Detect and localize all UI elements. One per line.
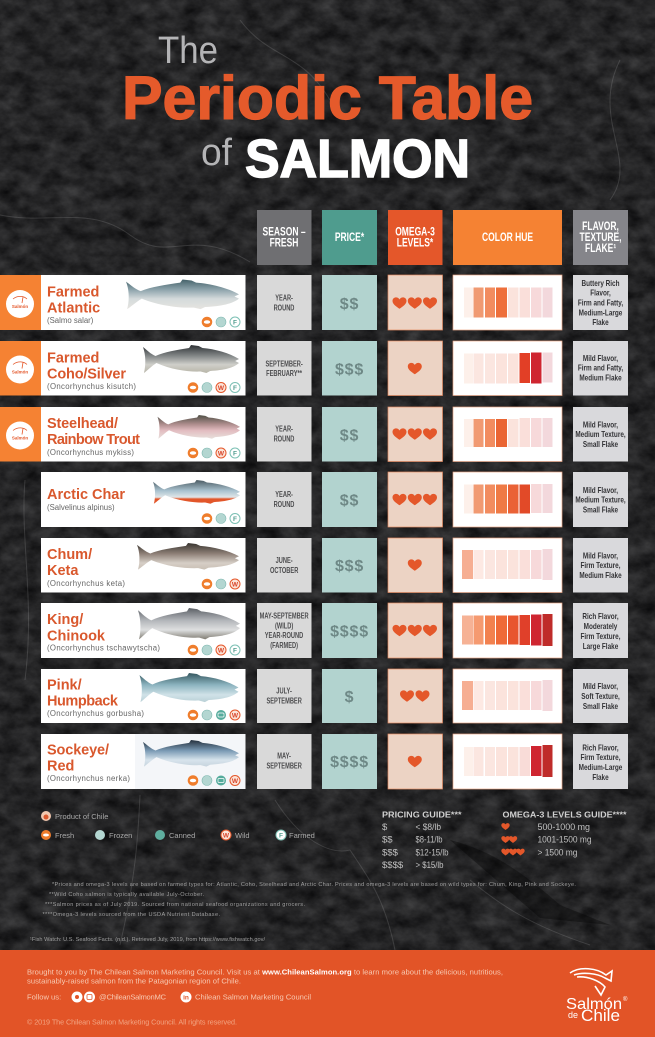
name card: Chum/ [47,547,92,563]
season [257,734,312,789]
name card: Farmed [47,284,99,300]
season: ROUND [274,433,294,444]
name card: W [232,778,239,785]
row: farmed coho/silver [0,341,628,396]
season [257,341,312,396]
product of chile tab: Salmón [12,370,28,374]
flavor: Rich Flavor, [582,743,619,753]
flavor: Mild Flavor, [583,353,618,363]
name card: Arctic Char [47,487,125,503]
name card: W [218,647,225,654]
name card: W [232,712,239,719]
name card: (Oncorhynchus tschawytscha) [47,644,160,652]
color hue swatches [453,341,562,396]
name card: F [233,385,237,392]
name card: (Oncorhynchus kisutch) [47,382,136,391]
price: $$$ [335,558,364,575]
pricing guide: $$ [382,834,393,846]
omega-3 levels guide [501,810,627,858]
flavor: Small Flake [583,505,618,515]
name card [41,734,246,789]
pricing guide: $8-11/lb [416,834,442,846]
name card: W [218,450,225,457]
social links: Chilean Salmon Marketing Council [195,992,311,1002]
flavor: Mild Flavor, [583,420,618,430]
copyright: © 2019 The Chilean Salmon Marketing Council. All rights reserved. [27,1018,237,1026]
omega-3 hearts [388,538,442,592]
flavor [573,275,628,330]
pricing guide: < $8/lb [416,822,441,833]
price: $$ [340,492,359,510]
column header: flavor: FLAKE¹ [585,243,617,255]
column header: flavor: TEXTURE, [579,232,622,244]
column header: color hue [453,210,562,265]
price [322,472,377,527]
season: FEBRUARY** [266,368,302,378]
name card: (Oncorhynchus nerka) [47,774,130,783]
name card: F [233,647,237,654]
product of chile tab: Salmón [12,304,28,309]
name card: Coho/Silver [47,366,126,382]
source citation: ¹Fish Watch: U.S. Seafood Facts. (n.d.). Retrieved July, 2019, from https://www.fishwatch.gov/ [30,937,265,943]
row: chum/keta [41,538,628,592]
flavor: Moderately [584,621,617,631]
row: sockeye/red [41,734,628,789]
footer band [0,950,655,1037]
name card [41,472,246,527]
pricing guide: $12-15/lb [416,848,448,858]
name card: W [232,581,239,588]
name card: F [233,516,237,523]
pricing guide: $ [382,822,388,833]
title [122,30,533,189]
flavor: Medium Flake [579,373,622,383]
price [322,407,377,462]
price: $$$$ [330,754,369,771]
omega-3 levels guide: 500-1000 mg [538,822,590,833]
color hue swatches [453,538,562,592]
season: (FARMED) [270,640,298,650]
row: steelhead/rainbow trout [0,407,628,462]
omega-3 levels guide: OMEGA-3 LEVELS GUIDE**** [502,810,627,820]
name card: F [233,450,237,457]
flavor: Firm Texture, [580,752,621,762]
column header: flavor [573,210,628,265]
flavor: Medium Texture, [575,429,626,439]
season: YEAR-ROUND [265,630,303,640]
season: YEAR- [275,489,293,499]
column header: color hue: COLOR HUE [482,232,533,244]
season: JULY- [276,685,292,696]
flavor: Mild Flavor, [583,485,618,495]
flavor [573,603,628,658]
flavor [573,669,628,723]
name card: Steelhead/ [47,416,118,432]
season: YEAR- [275,423,293,434]
color hue swatches [453,669,562,723]
season: SEPTEMBER [266,695,302,706]
flavor: Medium-Large [579,762,622,772]
season [257,669,312,723]
flavor: Buttery Rich [581,278,620,288]
flavor: Medium-Large [579,308,622,318]
name card: (Oncorhynchus keta) [47,579,125,588]
footnotes: ***Salmon prices as of July 2019. Sourced from national seafood organizations and grocers. [45,902,305,908]
title: SALMON [245,129,470,189]
price: $$ [340,428,359,444]
name card: Farmed [47,350,99,366]
omega-3 hearts [388,407,442,462]
flavor: Flake [592,772,609,782]
icon legend: Wild [235,831,250,840]
name card: Red [47,758,74,774]
social links [27,992,311,1002]
color hue swatches [453,407,562,462]
name card: Atlantic [47,300,100,316]
row: farmed atlantic [0,275,628,330]
name card: Sockeye/ [47,742,109,758]
column header: price: PRICE* [335,232,364,244]
price: $$$$ [330,624,369,640]
price: $ [345,689,354,706]
name card: (Oncorhynchus gorbusha) [47,709,144,718]
icon legend: Farmed [289,831,315,840]
name card [41,603,246,658]
flavor: Mild Flavor, [583,551,618,561]
price [322,538,377,592]
product of chile tab [0,275,41,330]
omega-3 levels guide: 1001-1500 mg [538,834,592,846]
footer message: sustainably-raised salmon from the Patagonian region of Chile. [27,976,241,986]
season: YEAR- [275,292,293,303]
pricing guide: $$$$ [382,860,404,871]
pricing guide: PRICING GUIDE*** [382,810,462,820]
name card [41,275,246,330]
flavor [573,472,628,527]
name card [41,669,246,723]
color hue swatches [453,734,562,789]
price [322,275,377,330]
flavor: Flake [592,317,609,327]
title: of [201,132,232,174]
logo: salmon de chile: Salmón [566,996,622,1013]
season [257,472,312,527]
logo: salmon de chile: Chile [581,1007,620,1025]
omega-3 hearts [388,734,442,789]
price: $$ [340,296,359,313]
footnotes: ****Omega-3 levels sourced from the USDA Nutrient Database. [42,912,220,918]
product of chile tab [0,407,41,462]
flavor [573,407,628,462]
omega-3 hearts [388,275,442,330]
name card: King/ [47,612,83,628]
season: MAY-SEPTEMBER [260,610,309,621]
omega-3 hearts [388,472,442,527]
omega-3 levels guide: > 1500 mg [538,848,578,858]
season: SEPTEMBER- [265,358,303,369]
flavor [573,538,628,592]
price [322,734,377,789]
omega-3 hearts [388,603,442,658]
flavor: Soft Texture, [581,691,620,701]
pricing guide [382,810,462,871]
flavor [573,734,628,789]
social links: @ChileanSalmonMC [99,992,167,1002]
name card [41,538,246,592]
season: ROUND [274,499,294,509]
flavor: Firm and Fatty, [578,363,623,373]
logo: salmon de chile: ® [623,996,628,1003]
icon legend: Product of Chile [55,812,108,821]
title: The [158,30,218,72]
flavor: Small Flake [583,439,618,449]
icon legend: W [223,832,230,839]
season [257,538,312,592]
column header: flavor: FLAVOR, [582,221,619,233]
flavor [573,341,628,396]
season: OCTOBER [270,565,299,575]
name card: Keta [47,563,79,579]
pricing guide: $$$ [382,848,399,858]
season [257,407,312,462]
season: ROUND [274,302,294,313]
flavor: Firm Texture, [580,560,621,570]
name card: (Salvelinus alpinus) [47,503,115,512]
omega-3 hearts [388,341,442,396]
flavor: Mild Flavor, [583,681,618,691]
column header: price [322,210,377,265]
name card: F [233,319,237,326]
product of chile tab [0,341,41,396]
icon legend: Frozen [109,831,132,840]
row: king/chinook [41,603,628,658]
price [322,603,377,658]
footnotes [42,882,576,918]
price: $$$ [335,362,364,378]
title: Periodic Table [122,64,533,132]
logo: salmon de chile: de [568,1010,578,1020]
name card: Humpback [47,694,119,710]
flavor: Large Flake [583,641,618,651]
flavor: Rich Flavor, [582,611,619,621]
season: (WILD) [275,620,294,631]
footnotes: *Prices and omega-3 levels are based on farmed types for: Atlantic, Coho, Steelhead and Arctic Char. Prices and omega-3 levels are based on wild types for: Chum, King, Pink and Sockeye. [52,882,576,888]
price [322,669,377,723]
color hue swatches [453,603,562,658]
column header: season: SEASON – [263,226,306,239]
flavor: Firm Texture, [580,631,621,641]
icon legend: Fresh [55,831,74,840]
name card: Chinook [47,628,106,644]
flavor: Firm and Fatty, [578,298,623,308]
season [257,603,312,658]
flavor: Medium Texture, [575,495,626,505]
name card [41,407,246,462]
price [322,341,377,396]
name card: Rainbow Trout [47,432,140,448]
omega-3 hearts [388,669,442,723]
color hue swatches [453,275,562,330]
name card: (Oncorhynchus mykiss) [47,448,134,457]
season: JUNE- [276,555,293,565]
row: pink/humpback [41,669,628,723]
color hue swatches [453,472,562,527]
season: SEPTEMBER [266,760,302,771]
flavor: Medium Flake [579,570,622,580]
icon legend: Canned [169,831,195,840]
footer message: Brought to you by The Chilean Salmon Marketing Council. Visit us at www.ChileanSalmon.org to learn more about the delicious, nutritious, [27,968,503,976]
footer message [27,968,503,986]
footnotes: **Wild Coho salmon is typically available July-October. [49,892,204,898]
column header: season: FRESH [270,237,298,250]
social links: in [183,994,189,1001]
column header: omega-3: OMEGA-3 [395,226,435,239]
name card: W [218,385,225,392]
season: MAY- [277,750,291,761]
pricing guide: > $15/lb [416,860,444,871]
column header: omega-3 [388,210,442,265]
logo: salmon de chile [566,969,628,1025]
season [257,275,312,330]
name card: Pink/ [47,678,82,694]
flavor: Small Flake [583,701,618,711]
name card: (Salmo salar) [47,316,94,325]
row: arctic char [41,472,628,527]
product of chile tab: Salmón [12,436,28,440]
name card [41,341,246,396]
column header: omega-3: LEVELS* [397,237,433,250]
icon legend [41,811,315,840]
icon legend: F [279,832,283,839]
social links: Follow us: [27,992,61,1002]
flavor: Flavor, [590,288,611,298]
column header: season [257,210,312,265]
